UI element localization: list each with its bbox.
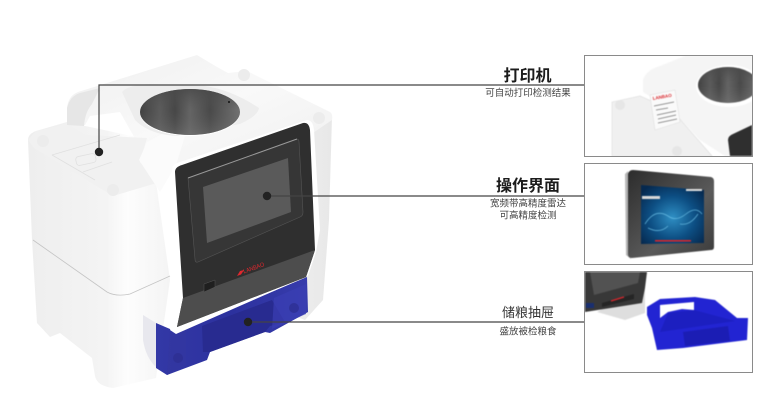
- tablet bevel: [625, 171, 631, 259]
- foot shadow: [143, 315, 156, 367]
- heading: drawer: 储粮抽屉: [502, 305, 554, 320]
- display screen: [203, 158, 291, 243]
- recess and lower body: [612, 96, 712, 156]
- callout dot: interface: [263, 192, 271, 200]
- LANBAO logo: [237, 262, 266, 276]
- LANBAO logo: LANBAO: [243, 262, 266, 275]
- funnel: [696, 66, 752, 106]
- printer slot details: [37, 69, 325, 196]
- white base: [598, 290, 646, 320]
- tablet screen: [641, 185, 704, 244]
- callout line: printer: [99, 85, 584, 152]
- callout line: interface: [267, 195, 584, 197]
- printed ticket: [650, 93, 679, 128]
- heading: printer: 打印机: [503, 66, 552, 85]
- printer unit body: [643, 56, 752, 156]
- printed ticket: LANBAO: [652, 93, 673, 101]
- heading: interface: 操作界面: [496, 177, 560, 195]
- blue drawer: [156, 277, 308, 375]
- description: drawer: 盛放被检粮食: [499, 326, 557, 338]
- callout line: drawer: [248, 321, 584, 323]
- lower lighter panel: [177, 250, 315, 327]
- seam line: [33, 240, 170, 295]
- screen corner: [728, 125, 752, 156]
- description: printer: 可自动打印检测结果: [485, 87, 571, 99]
- printer cover hump: [67, 88, 100, 126]
- upper unit top face: [67, 55, 332, 170]
- main instrument illustration: [28, 55, 332, 388]
- tablet frame: [628, 170, 714, 258]
- dark panel: [585, 272, 647, 312]
- lower left body: [28, 122, 170, 388]
- callout dot: printer: [95, 148, 103, 156]
- panel: printer detail: [584, 56, 762, 156]
- funnel collar: [122, 84, 259, 136]
- blue drawer part: [647, 297, 748, 350]
- printer recess top: [28, 124, 157, 196]
- funnel opening: [140, 89, 240, 136]
- right body side: [250, 117, 332, 320]
- panel: interface detail: [584, 164, 752, 264]
- description: interface: 宽频带高精度雷达: [490, 198, 566, 210]
- screen bezel: [188, 139, 303, 262]
- dark control panel: [175, 123, 315, 327]
- side panel corner: [139, 120, 190, 192]
- callout dot: drawer: [244, 318, 252, 326]
- usb slot: [204, 280, 215, 292]
- description: interface: 可高精度检测: [499, 210, 557, 222]
- white panel border: [170, 120, 320, 334]
- panel: drawer detail: [584, 272, 752, 372]
